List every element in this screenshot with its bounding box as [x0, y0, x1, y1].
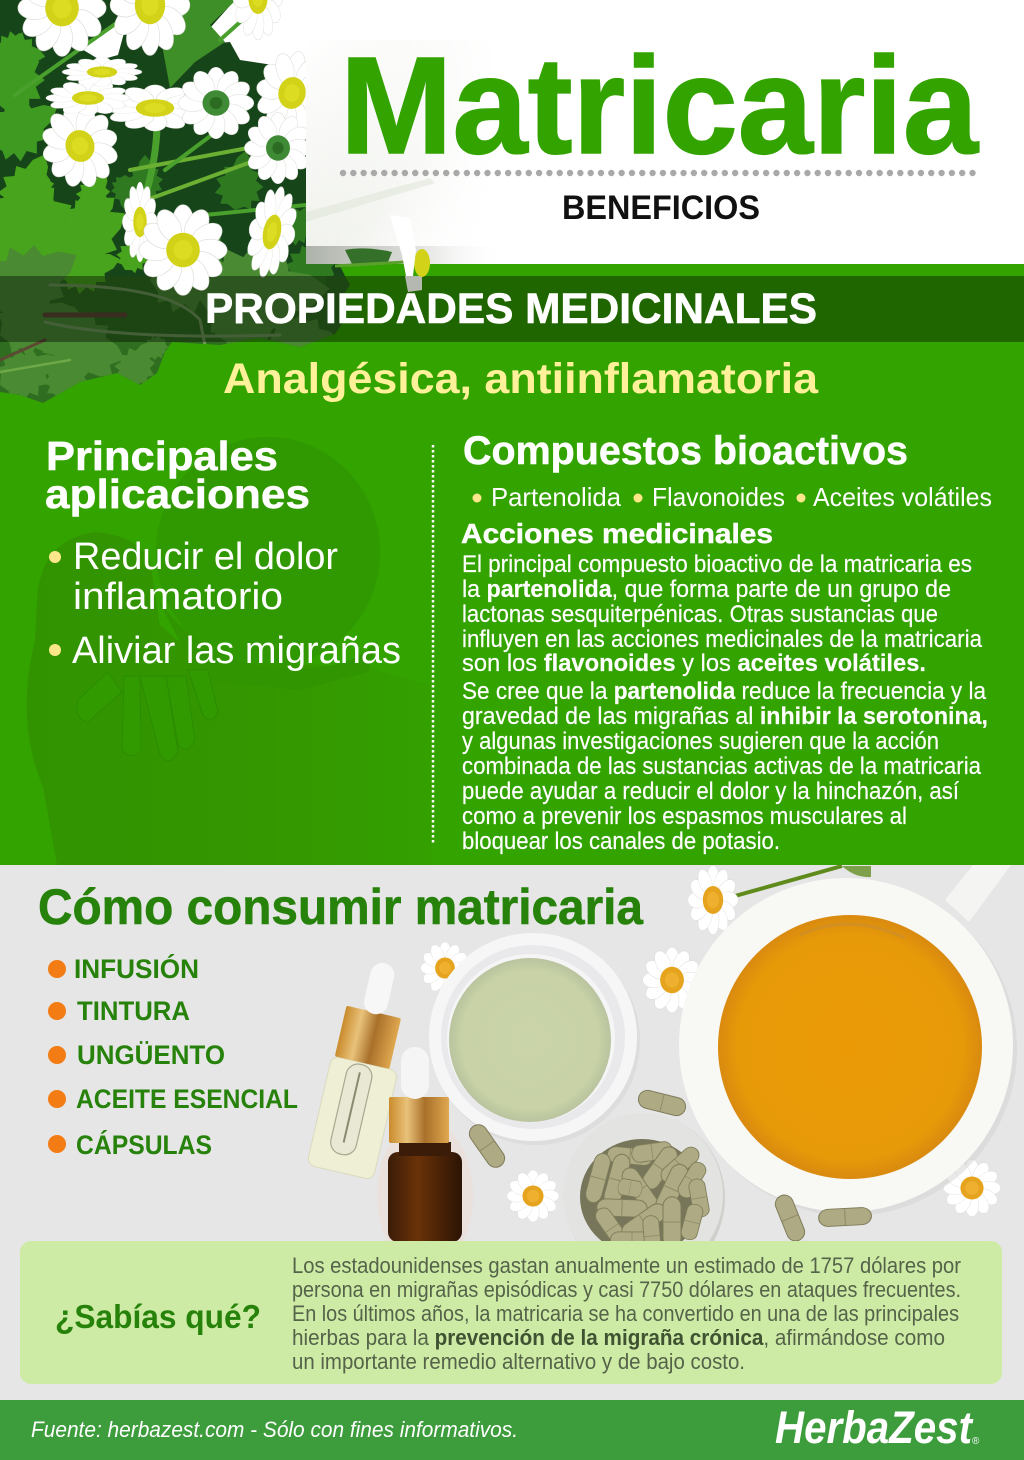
list: uses: Aliviar las migrañas: [72, 630, 401, 672]
list: consumption forms: TINTURA: [77, 996, 190, 1026]
list: consumption forms: INFUSIÓN: [74, 953, 199, 984]
logo: HerbaZest: HerbaZest: [775, 1402, 974, 1453]
list: consumption forms: CÁPSULAS: [76, 1129, 212, 1160]
list: compounds: Partenolida: [491, 482, 622, 512]
heading: how to consume: Cómo consumir matricaria: [38, 879, 644, 935]
list: compounds: [472, 482, 992, 512]
panel: how to consume: [0, 865, 1024, 1400]
text: medicinal actions: la partenolida, que forma parte de un grupo de: [462, 576, 951, 603]
text: medicinal actions: y algunas investigaciones sugieren que la acción: [462, 728, 939, 755]
text: medicinal actions: Se cree que la partenolida reduce la frecuencia y la: [462, 678, 986, 705]
text: medicinal actions: influyen en las acciones medicinales de la matricaria: [462, 626, 982, 653]
text: medicinal actions: combinada de las sustancias activas de la matricaria: [462, 753, 981, 780]
foliage leaves: [0, 0, 354, 409]
text: medicinal actions: lactonas sesquiterpénicas. Otras sustancias que: [462, 601, 938, 628]
heading: main uses: Principales: [46, 433, 278, 479]
title: Matricaria: [340, 29, 979, 183]
stems: [0, 15, 306, 372]
callout text: hierbas para la prevención de la migraña crónica, afirmándose como: [292, 1325, 945, 1350]
panel: bioactive compounds: [461, 429, 992, 855]
text: medicinal actions: como a prevenir los espasmos musculares al: [462, 803, 907, 830]
icon: stem and small daisies: [421, 866, 1001, 1222]
list: uses: inflamatorio: [73, 576, 283, 618]
icon: clear dropper bottle: [307, 956, 421, 1180]
callout: did you know: [20, 1241, 1002, 1384]
text: medicinal actions: El principal compuesto bioactivo de la matricaria es: [462, 551, 972, 578]
list: uses: Reducir el dolor: [73, 536, 338, 578]
image: matricaria flowers and foliage: [0, 0, 354, 409]
text: medicinal actions: gravedad de las migrañas al inhibir la serotonina,: [462, 703, 988, 730]
panel: green medicinal properties section: [0, 264, 1024, 865]
illustration: person holding shoulder: [27, 437, 432, 865]
list: consumption forms: ACEITE ESENCIAL: [76, 1084, 298, 1114]
source note: Fuente: herbazest.com - Sólo con fines informativos.: [31, 1417, 518, 1442]
text: medicinal actions: bloquear los canales de potasio.: [462, 828, 780, 855]
callout text: Los estadounidenses gastan anualmente un estimado de 1757 dólares por: [292, 1253, 961, 1278]
callout heading: ¿Sabías qué?: [55, 1298, 261, 1335]
list: compounds: Aceites volátiles: [813, 482, 992, 512]
subheading: medicinal actions: Acciones medicinales: [461, 518, 773, 549]
text: medicinal actions: [462, 551, 988, 855]
dotted divider: [343, 170, 975, 176]
band: medicinal properties heading: [0, 276, 1024, 342]
logo: HerbaZest: ®: [972, 1436, 980, 1447]
icon: loose capsules: [466, 1088, 872, 1244]
list: consumption forms: [48, 953, 298, 1160]
heading: bioactive compounds: Compuestos bioactivos: [463, 429, 908, 473]
list: uses: [49, 536, 401, 672]
ghost flowers behind title panel: [306, 40, 506, 266]
text: medicinal actions: puede ayudar a reducir el dolor y la hinchazón, así: [462, 778, 959, 805]
callout text: un importante remedio alternativo y de bajo costo.: [292, 1349, 745, 1374]
daisies: [18, 0, 306, 278]
icon: bowl of oil: [429, 933, 640, 1145]
white gaps: [80, 0, 306, 70]
heading: main uses: aplicaciones: [45, 471, 310, 517]
footer: [0, 1400, 1024, 1460]
list: compounds: Flavonoides: [652, 482, 785, 512]
icon: amber dropper bottle: [377, 1047, 473, 1270]
callout text: [292, 1253, 961, 1374]
heading: main uses: [45, 433, 310, 517]
list: consumption forms: UNGÜENTO: [77, 1040, 225, 1070]
subheading: properties: Analgésica, antiinflamatoria: [223, 355, 819, 403]
subtitle: BENEFICIOS: [562, 189, 760, 227]
illustration: products: [307, 865, 1017, 1282]
icon: tea cup: [679, 865, 1017, 1216]
icon: capsule bowl: [573, 1124, 725, 1241]
icon: flower on band edge: [139, 205, 430, 295]
text: medicinal actions: son los flavonoides y los aceites volátiles.: [462, 650, 926, 677]
panel: main uses: [45, 433, 401, 672]
band: medicinal properties heading: PROPIEDADES MEDICINALES: [205, 285, 817, 333]
